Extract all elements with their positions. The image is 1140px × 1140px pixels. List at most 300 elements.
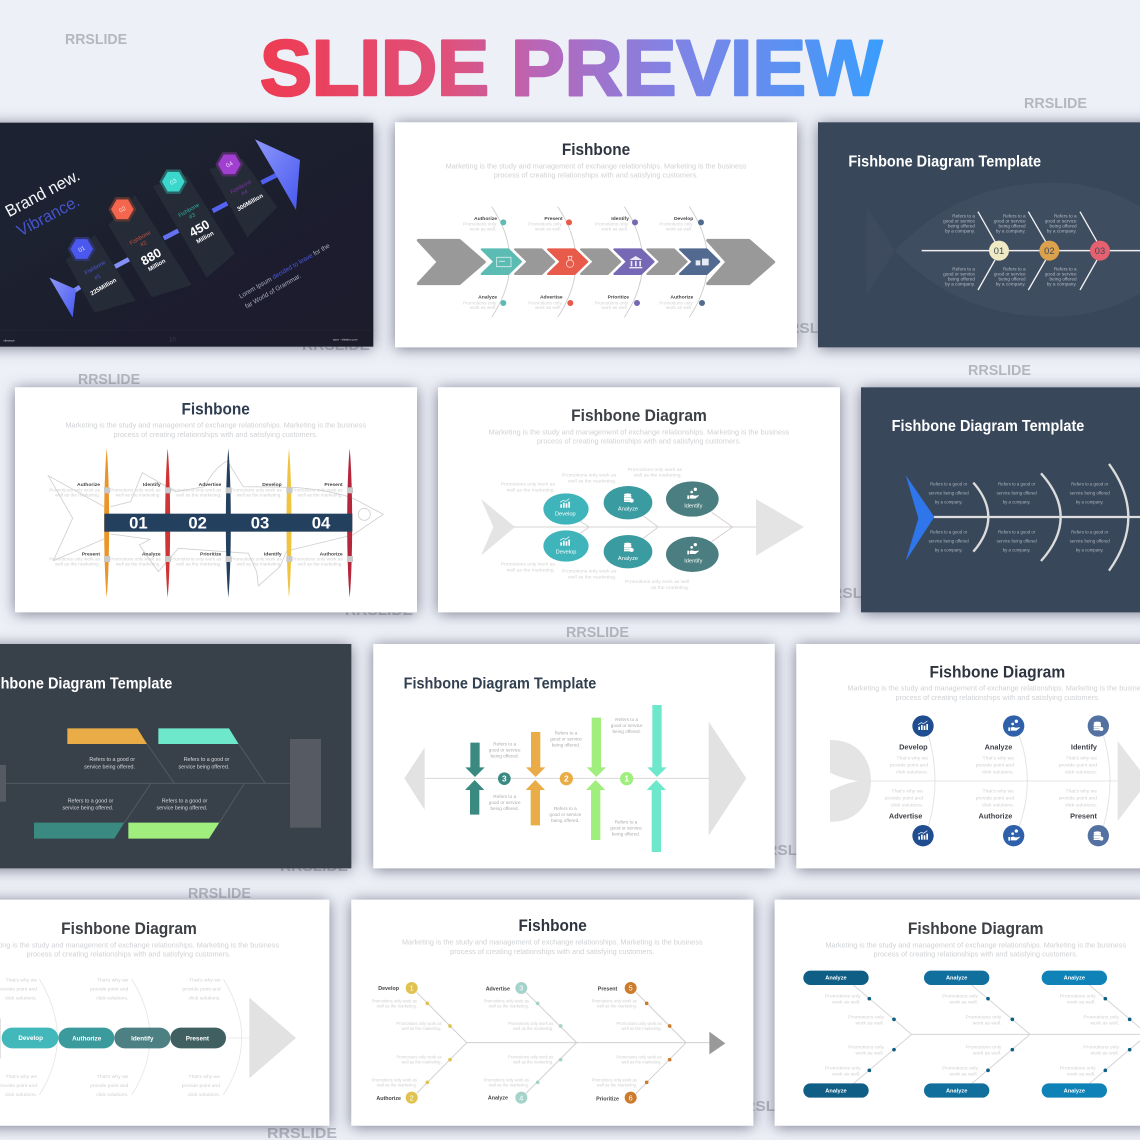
chevron: navy coins: [680, 249, 719, 274]
number bar: 04: [312, 514, 331, 533]
spine: [933, 513, 1140, 520]
pill: analyze 5: Analyze: [946, 1088, 967, 1094]
captions: work as well.: [949, 1000, 978, 1006]
pill: analyze 3: [1042, 971, 1107, 985]
card 3: 03: [169, 178, 179, 187]
captions: being offered: [999, 223, 1026, 228]
captions: provide point and: [1059, 796, 1097, 802]
card 2: [108, 195, 192, 297]
captions: service being offered.: [178, 764, 229, 770]
captions: service being offered: [1070, 491, 1110, 496]
labels: Promotions only work as: [49, 557, 101, 562]
rib labels: Promotions only: [595, 300, 629, 305]
heading: Fishbone Diagram Template: [892, 418, 1084, 435]
pill: analyze 5: [924, 1083, 989, 1098]
labels: Promotions only work as: [171, 488, 222, 493]
pill: analyze 2: [924, 971, 989, 985]
captions: well as the marketing.: [507, 487, 555, 493]
card 4: 300Million: [236, 193, 265, 213]
captions: Promotions only: [825, 1065, 861, 1071]
captions: good or service: [489, 747, 521, 752]
watermarks: RRSLIDE: [733, 1098, 801, 1115]
captions: well as the marketing.: [568, 479, 616, 485]
captions: work as well.: [1090, 1050, 1119, 1056]
number bar: 02: [188, 514, 207, 533]
labels: well as the marketing.: [237, 561, 282, 566]
rib labels: work as well.: [535, 226, 562, 231]
node 01: [989, 241, 1009, 261]
captions: That's why we: [1066, 756, 1097, 762]
watermarks: RRSLIDE: [188, 885, 251, 902]
captions: well as the marketing.: [513, 1060, 553, 1065]
captions: Promotions only: [1083, 1044, 1119, 1050]
description: Marketing is the study and management of exchange relationships. Marketing is the business: [65, 421, 366, 430]
node: develop top: [543, 493, 589, 525]
captions: Promotions only work as: [372, 1077, 417, 1082]
spine and bones: [6, 744, 290, 823]
captions: well as the marketing.: [489, 1083, 529, 1088]
captions: [0, 977, 221, 1098]
card 1: #1: [94, 273, 102, 282]
watermarks: RRSLIDE: [777, 320, 845, 337]
captions: well as the marketing.: [513, 1026, 553, 1031]
captions: Refers to a good or: [930, 482, 968, 487]
description: [65, 421, 366, 439]
captions: service being offered.: [62, 806, 113, 812]
labels: Promotions only work as: [292, 557, 343, 562]
panel: slide 3 fish template dark: [818, 122, 1140, 347]
labels: well as the marketing.: [298, 561, 343, 566]
node: identify top: Identify: [684, 504, 703, 510]
captions: That's why we: [983, 756, 1014, 762]
rib labels: work as well.: [666, 305, 693, 310]
panel: slide 11 numbered fishbone: [351, 900, 753, 1126]
spine and arcs: [870, 735, 1118, 827]
captions: Refers to a: [952, 213, 975, 218]
icons: identify: [1088, 715, 1109, 846]
captions: by a company.: [1003, 547, 1031, 552]
captions: good or service: [1045, 218, 1077, 223]
rib labels: Advertise: [540, 295, 563, 301]
labels: Promotions only work as: [231, 557, 282, 562]
captions: Promotions only: [966, 1014, 1002, 1020]
captions: good or service: [994, 272, 1026, 277]
labels: Develop: [262, 482, 282, 488]
card 3: Million: [196, 231, 215, 246]
captions: being offered.: [551, 818, 580, 823]
head: [756, 499, 804, 556]
labels: Advertise: [889, 811, 922, 820]
pill: analyze 3: Analyze: [1064, 976, 1085, 982]
node 5 present: Present: [598, 987, 618, 993]
captions: provide point and: [182, 986, 221, 992]
card 3: #3: [188, 212, 197, 221]
panel: slide 7 parallelograms dark: [0, 644, 351, 868]
card 4: Fishbone: [230, 179, 253, 196]
node 1: [620, 772, 633, 785]
pill: analyze 1: Analyze: [825, 976, 847, 982]
captions: provide point and: [90, 1083, 129, 1089]
labels: Promotions only work as: [110, 557, 161, 562]
watermarks: RRSLIDE: [280, 858, 348, 875]
heading: Fishbone Diagram: [571, 406, 707, 425]
description: [0, 940, 279, 959]
captions: provide point and: [1059, 763, 1097, 769]
captions: being offered.: [490, 806, 519, 811]
captions: Refers to a: [1003, 267, 1026, 272]
captions: click solutions.: [1065, 770, 1097, 776]
labels: Authorize: [320, 551, 343, 557]
captions: click solutions.: [5, 995, 37, 1001]
captions: work as well.: [973, 1020, 1001, 1026]
spine and bones: [513, 512, 757, 542]
panel: slide 2 chevron fishbone: [395, 122, 797, 347]
captions: click solutions.: [982, 803, 1014, 809]
captions: service being offered: [997, 491, 1037, 496]
captions: [489, 717, 643, 836]
rib labels: Authorize: [670, 295, 694, 301]
heading: Fishbone: [518, 916, 587, 935]
labels: well as the marketing.: [116, 561, 161, 566]
watermarks: RRSLIDE: [65, 31, 127, 48]
captions: Refers to a good or: [68, 798, 114, 804]
captions: well as the marketing.: [634, 473, 682, 479]
number bar: 01: [129, 514, 148, 533]
description: process of creating relationships with and satisfying customers.: [113, 430, 318, 439]
bones: [978, 212, 1097, 290]
rib labels: Promotions only: [595, 222, 629, 227]
icons: analyze: [1003, 715, 1024, 846]
captions: good or service: [611, 723, 643, 728]
labels: Identify: [264, 551, 282, 557]
node: develop bottom: Develop: [556, 550, 576, 556]
pill: identify: Identify: [131, 1035, 154, 1042]
captions: That's why we: [892, 789, 923, 795]
node: analyze top: Analyze: [618, 506, 638, 512]
labels: Prioritize: [200, 551, 222, 557]
description: process of creating relationships with and satisfying customers.: [494, 171, 698, 180]
labels: Analyze: [985, 743, 1012, 752]
footer: [0, 331, 373, 344]
pill: present: [170, 1028, 226, 1048]
panel: slide 9 circles and arcs: [796, 644, 1140, 868]
card 2: 02: [118, 206, 128, 214]
node 03: [1090, 241, 1110, 261]
captions: by a company.: [1076, 547, 1104, 552]
captions: provide point and: [976, 796, 1014, 802]
pill: analyze 4: Analyze: [825, 1088, 847, 1094]
captions: good or service: [549, 812, 582, 817]
number bar: 03: [251, 514, 269, 533]
captions: being offered.: [612, 729, 641, 734]
node: analyze bottom: [604, 535, 652, 568]
card 4: 04: [225, 161, 235, 169]
node 01: 01: [994, 246, 1004, 256]
rib labels: Promotions only: [528, 222, 562, 227]
captions: work as well.: [1090, 1020, 1119, 1026]
card 1: 225Million: [90, 278, 118, 297]
captions: by a company.: [1076, 500, 1104, 505]
labels: Present: [82, 551, 100, 557]
captions: Refers to a: [952, 267, 975, 272]
card 2: Million: [147, 258, 167, 273]
chevron: teal card: [482, 249, 521, 274]
captions: [501, 467, 689, 591]
captions: Refers to a: [615, 717, 638, 722]
arrows: teal: [465, 743, 485, 815]
card 2: #2: [140, 240, 148, 248]
captions: click solutions.: [1065, 803, 1097, 809]
watermarks: RRSLIDE: [566, 624, 629, 641]
description: process of creating relationships with and satisfying customers.: [450, 947, 654, 956]
tail block: [0, 765, 6, 802]
captions: Promotions only: [848, 1014, 884, 1020]
node 4 analyze: [488, 1092, 527, 1104]
labels: Identify: [1071, 743, 1098, 752]
head: [1118, 741, 1140, 821]
node 3 advertise: [486, 982, 527, 994]
captions: by a company.: [935, 547, 963, 552]
captions: good or service: [943, 272, 975, 277]
captions: Promotions only work as: [562, 473, 617, 479]
arrow: head: [255, 139, 300, 210]
node 4 analyze: Analyze: [488, 1096, 508, 1102]
captions: being offered: [948, 277, 975, 282]
labels: Present: [324, 482, 343, 488]
labels: well as the marketing.: [176, 492, 221, 497]
captions: provide point and: [976, 763, 1014, 769]
spine and bones: [853, 985, 1140, 1084]
captions: provide point and: [885, 796, 923, 802]
captions: well as the marketing.: [401, 1026, 442, 1031]
captions: [885, 756, 1097, 809]
captions: click solutions.: [96, 1092, 128, 1098]
node: identify bottom: [666, 537, 719, 572]
captions: being offered: [1050, 277, 1077, 282]
heading: Fishbone: [181, 399, 250, 418]
head: [709, 722, 746, 836]
captions: Promotions only work as: [484, 1077, 529, 1082]
captions: That's why we: [983, 789, 1014, 795]
heading: Fishbone Diagram Template: [848, 154, 1041, 171]
rib labels: work as well.: [470, 305, 496, 310]
bone dots: [425, 1001, 671, 1084]
captions: That's why we: [6, 1074, 37, 1080]
captions: click solutions.: [982, 770, 1014, 776]
labels: Authorize: [979, 811, 1012, 820]
captions: Promotions only: [966, 1044, 1002, 1050]
bone dots: [867, 997, 1131, 1072]
captions: That's why we: [97, 1074, 129, 1080]
chevron: tail: [418, 240, 484, 284]
connector squares: [104, 487, 353, 562]
captions: being offered: [1050, 223, 1077, 228]
spine: [922, 248, 1140, 253]
captions: Promotions only work as: [628, 467, 683, 473]
captions: Refers to a: [554, 806, 577, 811]
captions: Refers to a: [1003, 213, 1026, 218]
card 1: [66, 235, 136, 313]
captions: Refers to a good or: [1071, 529, 1109, 534]
pill: present: Present: [186, 1035, 210, 1042]
arrow: tail: [49, 278, 76, 317]
card 2: 880: [139, 246, 164, 268]
captions: by a company.: [945, 228, 975, 233]
connector bars: [73, 175, 277, 292]
banner: dark teal: [34, 823, 124, 839]
captions: being offered: [948, 223, 975, 228]
captions: good or service: [550, 736, 582, 741]
labels: well as the marketing.: [298, 492, 343, 497]
captions: Refers to a: [615, 819, 638, 824]
captions: Refers to a good or: [998, 482, 1036, 487]
captions: That's why we: [189, 977, 221, 983]
node 2 authorize: 2: [410, 1093, 414, 1102]
captions: provide point and: [890, 763, 928, 769]
chevrons: grey small: [515, 249, 687, 274]
description: [847, 684, 1140, 702]
rib labels: Promotions only: [659, 222, 693, 227]
captions: well as the marketing.: [377, 1003, 417, 1008]
node 1: 1: [624, 774, 629, 784]
captions: work as well.: [973, 1050, 1001, 1056]
heading: Fishbone Diagram Template: [404, 675, 596, 692]
arrows: mint: [647, 705, 667, 852]
node 3: [498, 772, 511, 785]
labels: Analyze: [142, 551, 161, 557]
panel: slide 8 arrows fishbone: [373, 644, 775, 868]
captions: Refers to a: [555, 730, 578, 735]
heading: Fishbone Diagram: [61, 919, 197, 938]
node 5 present: 5: [629, 984, 633, 993]
labels: well as the marketing.: [116, 492, 161, 497]
captions: well as the marketing.: [568, 575, 616, 581]
labels: [49, 482, 343, 566]
rib dots: [500, 219, 705, 306]
panel: slide 4 fish outline with spindles: [15, 387, 417, 612]
captions: well as the marketing.: [507, 567, 555, 573]
rib labels: [463, 216, 694, 310]
node 1 develop: Develop: [378, 986, 400, 992]
labels: well as the marketing.: [55, 492, 100, 497]
captions: Promotions only work as well: [625, 579, 689, 585]
main title: slide preview: SLIDE: [260, 23, 489, 112]
watermarks: RRSLIDE: [302, 337, 370, 354]
arrows: orange: [526, 732, 545, 825]
labels: Develop: [899, 743, 928, 752]
watermarks: RRSLIDE: [968, 362, 1031, 379]
chevron: purple bank: [614, 249, 654, 274]
captions: Promotions only work as: [396, 1054, 442, 1059]
captions: [929, 482, 1110, 552]
captions: Promotions only work as: [592, 998, 637, 1003]
rib labels: Present: [544, 216, 563, 222]
description: Marketing is the study and management of exchange relationships. Marketing is the business: [489, 427, 789, 436]
card 3: [153, 171, 235, 278]
captions: by a company.: [1047, 228, 1077, 233]
captions: Promotions only work as: [501, 561, 556, 567]
labels: well as the marketing.: [176, 561, 221, 566]
captions: work as well.: [949, 1071, 978, 1077]
captions: service being offered.: [84, 764, 135, 770]
pill: authorize: [58, 1028, 114, 1048]
labels: Promotions only work as: [110, 488, 161, 493]
captions: good or service: [489, 800, 521, 805]
captions: Promotions only: [1060, 994, 1096, 1000]
main title: slide preview: [260, 23, 882, 112]
captions: Promotions only: [942, 1065, 978, 1071]
card 3: 450: [187, 217, 212, 240]
captions: That's why we: [1066, 789, 1097, 795]
pill: analyze 6: Analyze: [1064, 1088, 1085, 1094]
captions: work as well.: [832, 1000, 861, 1006]
labels: Advertise: [199, 482, 222, 488]
watermarks: RRSLIDE: [755, 842, 823, 859]
arrow tail: [906, 475, 934, 561]
captions: being offered.: [552, 742, 580, 747]
captions: by a company.: [935, 500, 963, 505]
arcs and spine: [39, 979, 250, 1095]
description: [825, 940, 1126, 959]
node 3 advertise: 3: [519, 984, 523, 993]
node 2: 2: [564, 774, 569, 784]
captions: Promotions only work as: [501, 481, 556, 487]
node: develop bottom: [543, 530, 589, 562]
panel: slide 12 blue pills fishbone: [775, 900, 1140, 1126]
captions: well as the marketing.: [401, 1060, 442, 1065]
banner: orange: [67, 728, 147, 744]
description: process of creating relationships with and satisfying customers.: [26, 950, 231, 959]
captions: being offered.: [612, 831, 640, 836]
captions: good or service: [610, 825, 642, 830]
rib labels: Promotions only: [463, 222, 497, 227]
node: identify bottom: Identify: [684, 559, 703, 565]
captions: as the marketing.: [651, 585, 689, 591]
watermarks: RRSLIDE: [345, 602, 413, 619]
captions: good or service: [943, 218, 975, 223]
captions: Refers to a good or: [930, 529, 968, 534]
panel: slide 5 ellipses fishbone: [438, 387, 840, 612]
captions: Promotions only: [942, 994, 978, 1000]
rib labels: work as well.: [470, 226, 496, 231]
pill: analyze 6: [1042, 1083, 1107, 1098]
captions: service being offered: [929, 538, 969, 543]
captions: click solutions.: [189, 995, 221, 1001]
captions: well as the marketing.: [377, 1083, 417, 1088]
captions: service being offered: [997, 538, 1037, 543]
head block: [290, 739, 321, 828]
rib labels: work as well.: [666, 226, 693, 231]
captions: good or service: [1045, 272, 1077, 277]
captions: by a company.: [1003, 500, 1031, 505]
captions: Promotions only work as: [562, 569, 617, 575]
node 3: 3: [502, 774, 507, 784]
description: process of creating relationships with and satisfying customers.: [895, 693, 1100, 702]
description: [402, 938, 703, 956]
captions: Promotions only: [1083, 1014, 1119, 1020]
tail: [481, 499, 515, 556]
captions: service being offered: [929, 491, 969, 496]
pill: analyze 2: Analyze: [946, 976, 967, 982]
rib labels: Prioritize: [608, 295, 629, 301]
node: analyze top: [604, 486, 652, 519]
captions: Refers to a: [493, 794, 516, 799]
panel: slide 10 pills: [0, 900, 329, 1126]
node 2: [560, 772, 573, 785]
captions: Promotions only work as: [508, 1021, 553, 1026]
number bar: [104, 514, 352, 533]
rib labels: work as well.: [601, 305, 628, 310]
